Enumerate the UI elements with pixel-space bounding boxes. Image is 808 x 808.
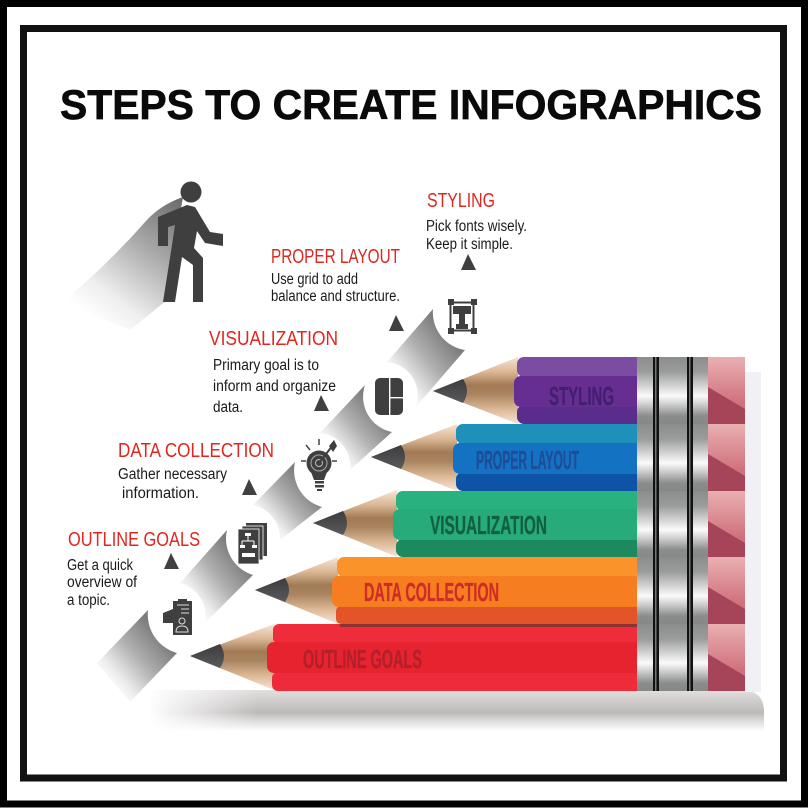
step heading: styling: STYLING: [427, 189, 495, 212]
marker triangle: proper layout: [389, 315, 404, 331]
ground shadow: [148, 688, 764, 738]
diagonal path bands: [97, 309, 465, 702]
pencil: outline goals: [190, 624, 745, 691]
pencil label: visualization: VISUALIZATION: [430, 510, 547, 540]
step description line 2: outline goals: overview of: [67, 574, 138, 591]
icon: walking person: [158, 182, 223, 302]
pencil: proper layout: [371, 424, 745, 491]
pencil tip: proper layout: [371, 424, 457, 491]
pencil tip: styling: [433, 357, 518, 424]
pencil body: outline goals: [267, 624, 647, 691]
marker triangle: visualization: [314, 395, 329, 411]
step description line 3: outline goals: a topic.: [67, 592, 110, 609]
pencil label: outline goals: OUTLINE GOALS: [303, 644, 422, 674]
step heading: data collection: DATA COLLECTION: [118, 439, 274, 462]
step description line: styling: Keep it simple.: [426, 236, 513, 253]
step text: proper layout: [271, 245, 404, 331]
step description line: proper layout: balance and structure.: [271, 288, 400, 305]
step text: outline goals: [67, 528, 200, 609]
pencil ferrule and eraser: proper layout: [637, 424, 745, 491]
pencil ferrule and eraser: outline goals: [637, 624, 745, 691]
title: STEPS TO CREATE INFOGRAPHICS: [60, 81, 762, 128]
pencil: styling: [433, 357, 745, 424]
step description: outline goals: Get a quick: [67, 557, 133, 574]
pencil: data collection: [255, 557, 745, 624]
pencil ferrule and eraser: styling: [637, 357, 745, 424]
step description: styling: Pick fonts wisely.: [426, 218, 527, 235]
pencil body: data collection: [332, 557, 647, 624]
step heading: visualization: VISUALIZATION: [209, 327, 338, 350]
pencil body: visualization: [393, 491, 647, 557]
pencil tip: data collection: [255, 557, 338, 624]
pencil ferrule and eraser: data collection: [637, 557, 745, 624]
pencil label: data collection: DATA COLLECTION: [364, 577, 499, 607]
icon: lightbulb with target: [301, 439, 337, 491]
step text: styling: [426, 189, 527, 270]
step description: proper layout: Use grid to add: [271, 271, 358, 288]
step description line 2: data collection: information.: [122, 485, 199, 502]
step text: visualization: [209, 327, 338, 416]
pencil: visualization: [313, 490, 745, 558]
pencil ferrule and eraser: visualization: [637, 491, 745, 558]
marker triangle: styling: [461, 254, 476, 270]
pencil: proper layout: PROPER LAYOUT: [476, 445, 579, 475]
pencil label: styling: STYLING: [549, 381, 614, 411]
pencil body: proper layout: [453, 424, 647, 491]
right side shadow: [745, 372, 761, 692]
pencil tip: outline goals: [190, 624, 274, 690]
pencil tip: visualization: [313, 490, 397, 557]
step description line 2: visualization: inform and organize: [213, 378, 336, 395]
step description: data collection: Gather necessary: [118, 466, 227, 483]
marker triangle: data collection: [242, 479, 257, 495]
step description line 3: visualization: data.: [213, 399, 243, 416]
icon: type tool: [448, 299, 477, 334]
step text: data collection: [118, 439, 274, 502]
step heading: proper layout: PROPER LAYOUT: [271, 245, 400, 268]
icon: document flowchart: [238, 523, 267, 564]
person shadow: [63, 197, 183, 330]
pencil body: styling: [514, 357, 647, 424]
step heading: outline goals: OUTLINE GOALS: [68, 528, 200, 551]
marker triangle: outline goals: [164, 553, 179, 569]
step description: visualization: Primary goal is to: [213, 357, 319, 374]
icon: clipboard profile: [163, 599, 192, 635]
icon: page layout: [375, 378, 403, 415]
